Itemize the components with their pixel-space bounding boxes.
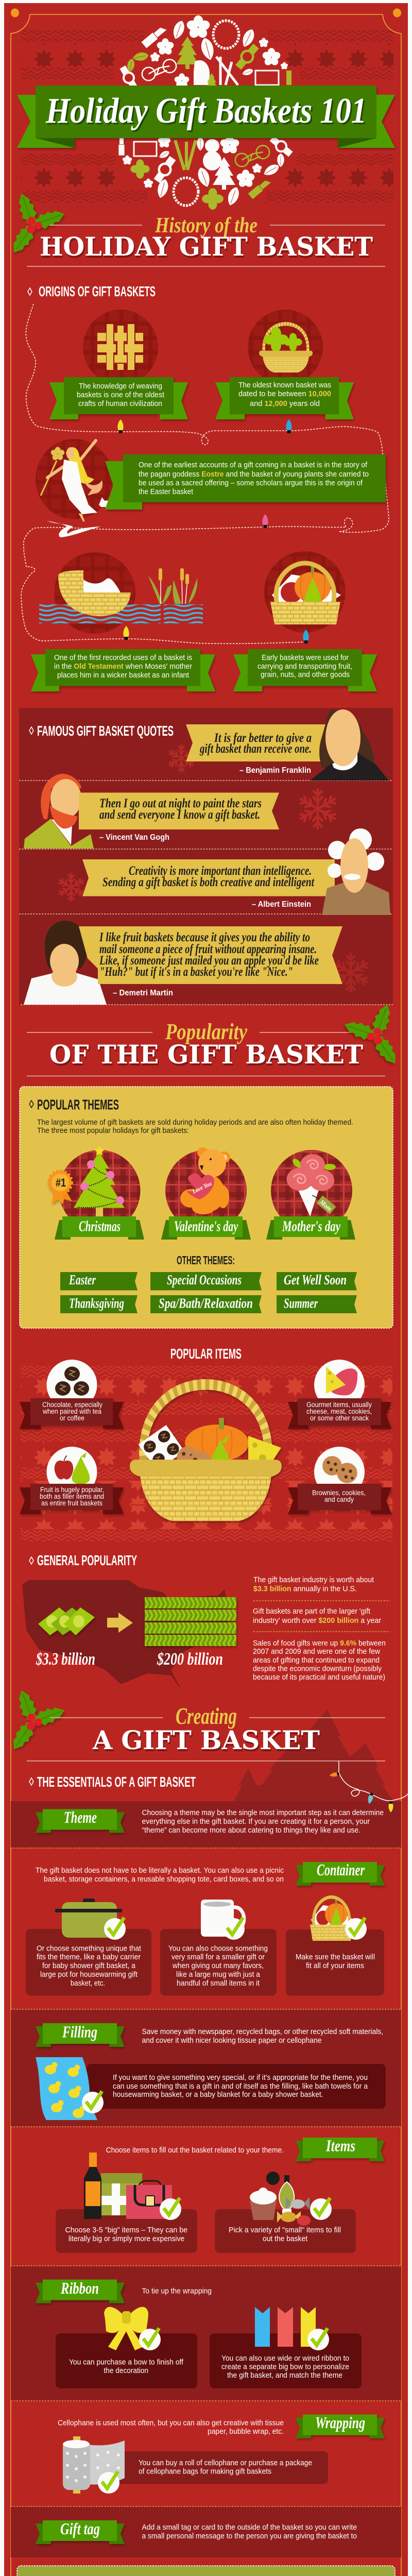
card: unique container: Or choose something unique that [37, 1944, 142, 1953]
ribbon: gourmet [288, 1398, 391, 1429]
ribbon label: container [296, 1860, 385, 1886]
text: filling: Save money with newspaper, recycled bags, or other recycled soft materials, [142, 2027, 383, 2036]
heading: popular items: POPULAR ITEMS [170, 1346, 242, 1362]
card: big items: literally big or simply more expensive [68, 2234, 184, 2243]
section heading: creating: Creating [176, 1703, 237, 1729]
item: cheese and meat [314, 1360, 365, 1410]
text: theme: “theme” can become more about catering to things they like and use. [142, 1826, 360, 1835]
text: filling [142, 2027, 383, 2045]
quote: Demetri Martin: I like fruit baskets because it gives you the ability to [99, 930, 310, 944]
section heading: history: HOLIDAY GIFT BASKET [40, 231, 373, 262]
text: ribbon: To tie up the wrapping [142, 2287, 212, 2296]
ribbon label: ribbon [36, 2279, 125, 2303]
panel: theme [11, 1801, 401, 1848]
text: themes intro: The largest volume of gift baskets are sold during holiday periods and are also often holiday themed. [37, 1118, 353, 1127]
ornament made of gift icons [117, 15, 295, 210]
quote: Benjamin Franklin [186, 724, 330, 775]
ribbon label: gift tag: Gift tag [60, 2519, 100, 2538]
text: wrapping: Cellophane is used most often, but you can also get creative with tissue [58, 2419, 284, 2428]
ribbon: valentine's day [161, 1216, 251, 1240]
panel: famous quotes [19, 708, 393, 1005]
ribbon: old testament: in the Old Testament when Moses' mother [54, 662, 192, 671]
callout: special filling: If you want to give something very special, or if it's appropriate for the theme, you [113, 2073, 368, 2082]
ribbon: weaving fact [49, 377, 188, 419]
quote: Benjamin Franklin: – Benjamin Franklin [239, 766, 311, 775]
ribbon: brownies: Brownies, cookies, [312, 1489, 366, 1497]
card: unique container [26, 1929, 151, 1996]
icon: pot [55, 1899, 126, 1940]
heading: origins of gift baskets [28, 283, 156, 299]
illustration: Moses basket on water [39, 552, 203, 634]
tag: special occasions: Special Occasions [167, 1272, 242, 1287]
text: container [36, 1866, 284, 1884]
portrait: Franklin [310, 709, 389, 781]
card: wide ribbon [210, 2333, 362, 2388]
ribbon: early baskets: grain, nuts, and other goods [261, 670, 350, 679]
panel: filling [11, 2009, 401, 2127]
text: theme: Choosing a theme may be the single most important step as it can determine [142, 1808, 384, 1817]
text: filling: and cover it with nicer looking tissue paper or cellophane [142, 2036, 321, 2045]
quote: Demetri Martin: – Demetri Martin [113, 989, 173, 997]
card: small container: very small for a smaller gift or [171, 1953, 265, 1961]
text: gift tag: Add a small tag or card to the outside of the basket so you can write [142, 2523, 357, 2532]
text: popularity facts: Sales of food gifts were up 9.6% between [253, 1639, 386, 1648]
ribbon: oldest basket: dated to be between 10,000 [238, 389, 331, 398]
icon: weave circle [83, 310, 158, 385]
ribbon label: container: Container [317, 1860, 365, 1879]
tag: thanksgiving [60, 1295, 138, 1313]
ribbon: Eostre story: the Easter basket [139, 487, 194, 496]
section heading: popularity [27, 1019, 385, 1076]
callout: cellophane: of cellophane bags for making gift baskets [139, 2467, 271, 2476]
portrait: Einstein [322, 828, 390, 915]
icon: holly [342, 1002, 402, 1068]
text: wrapping [58, 2419, 284, 2436]
ribbon label: items: Items [325, 2137, 355, 2155]
text: popularity facts [253, 1575, 390, 1682]
card: wide ribbon: You can also use wide or wired ribbon to [221, 2354, 349, 2363]
icon: ribbon strips [255, 2307, 329, 2350]
heading: essentials [29, 1774, 196, 1790]
heading: general popularity [29, 1552, 137, 1568]
text: popularity facts: $3.3 billion annually in the U.S. [253, 1585, 357, 1593]
ribbon: old testament: places him in a wicker basket as an infant [57, 671, 190, 680]
text: theme [142, 1808, 384, 1835]
text: themes intro [37, 1118, 353, 1135]
tag: spa bath relaxation: Spa/Bath/Relaxation [159, 1295, 253, 1311]
ribbon: weaving fact: crafts of human civilization [78, 399, 162, 408]
ribbon: christmas [55, 1216, 144, 1240]
illustration: big gift basket [130, 1384, 282, 1521]
ribbon: Eostre story [105, 454, 386, 510]
panel: ribbon [11, 2266, 401, 2401]
ribbon label: theme: Theme [64, 1808, 97, 1826]
ribbon: weaving fact: baskets is one of the oldest [77, 391, 165, 399]
card: unique container: large pot for housewarming gift [40, 1970, 138, 1979]
text: popularity facts: The gift basket industry is worth about [253, 1575, 374, 1584]
tag: thanksgiving: Thanksgiving [69, 1295, 124, 1311]
card: big items [56, 2209, 197, 2253]
icon: pink bulb [262, 514, 268, 528]
title banner [17, 86, 395, 148]
ribbon: Eostre story: the pagan goddess Eostre and the basket of young plants she carried to [139, 470, 369, 479]
ribbon: chocolate: Chocolate, especially [42, 1401, 102, 1409]
text: items: Choose items to fill out the basket related to your theme. [106, 2146, 284, 2155]
tag: get well soon: Get Well Soon [284, 1272, 347, 1287]
ribbon: fruit: both as filler items and [40, 1493, 104, 1500]
callout: special filling: housewarming basket, or a baby blanket for a baby shower basket. [113, 2090, 323, 2099]
quote: Benjamin Franklin: It is far better to give a [214, 731, 312, 745]
quote: Demetri Martin: Like, if someone just mailed you an apple you'd be like [99, 954, 319, 968]
illustration: swan [47, 521, 101, 537]
icon: cellophane roll [63, 2436, 125, 2494]
ribbon: chocolate: when paired with tea [42, 1408, 101, 1415]
tag: easter [60, 1272, 138, 1290]
sweater pattern: popular items [21, 1366, 392, 1541]
illustration: goddess Eostre [36, 439, 117, 521]
tag: easter: Easter [68, 1272, 96, 1287]
snowflake [58, 874, 84, 901]
quote: Vincent Van Gogh [79, 792, 279, 842]
ribbon label: items [296, 2137, 385, 2161]
card: bow [56, 2333, 197, 2388]
theme: mother's day roses [271, 1150, 352, 1231]
ribbon: oldest basket: and 12,000 years old [250, 399, 320, 408]
quote: Albert Einstein: Creativity is more important than intelligence. [129, 864, 312, 878]
text: popularity facts: areas of gifting that continued to expand [253, 1656, 380, 1665]
ribbon: mother's day [266, 1216, 355, 1240]
heading: popular themes [29, 1096, 119, 1113]
quote: Albert Einstein [82, 859, 335, 909]
ribbon label: theme [36, 1808, 125, 1833]
ribbon: Eostre story: One of the earliest accounts of a gift coming in a basket is in the story of [139, 461, 368, 469]
quote: Demetri Martin: "Huh?" but if it's in a basket you're like "Nice." [99, 965, 293, 979]
ribbon: oldest basket: The oldest known basket was [238, 381, 331, 389]
heading: other themes: OTHER THEMES: [177, 1253, 235, 1267]
icon: small basket [310, 1897, 367, 1941]
title text: Holiday Gift Baskets 101 [45, 91, 367, 131]
heading: essentials: THE ESSENTIALS OF A GIFT BASKET [37, 1774, 196, 1790]
card: wide ribbon: the gift basket, and match the theme [227, 2371, 342, 2380]
card: small container: when giving out many favors, [172, 1961, 264, 1970]
quote: Vincent Van Gogh: – Vincent Van Gogh [99, 833, 169, 842]
card: small container: You can also choose something [168, 1944, 268, 1953]
section heading: history: History of the [154, 214, 258, 238]
item: chocolate [46, 1360, 97, 1410]
icon: holly [7, 191, 67, 257]
illustration: big items [84, 2153, 181, 2220]
card: small container [160, 1929, 277, 1996]
card: big items: Choose 3-5 "big" items – They can be [65, 2226, 187, 2234]
heading: famous gift basket quotes [29, 723, 174, 739]
icon: duck blanket [36, 2057, 104, 2120]
ribbon label: filling: Filling [62, 2023, 97, 2041]
section heading: creating [27, 1703, 385, 1761]
section heading: popularity: OF THE GIFT BASKET [49, 1039, 363, 1070]
item: fruit [46, 1447, 97, 1497]
portrait: Demetri Martin [24, 921, 107, 1005]
chart: USA map with money [22, 1580, 236, 1690]
icon: mug [201, 1900, 245, 1940]
portrait: Van Gogh [24, 774, 94, 849]
illustration: small items [250, 2172, 332, 2226]
quote: Vincent Van Gogh: Then I go out at night to paint the stars [99, 796, 262, 810]
icon: yellow bow [104, 2307, 161, 2350]
snowflake [333, 954, 369, 991]
icon: blue bulb [303, 630, 309, 643]
label: 3.3 billion: $3.3 billion [36, 1650, 95, 1669]
section heading: history [27, 214, 385, 266]
quote: Benjamin Franklin: gift basket than receive one. [199, 742, 312, 756]
ribbon: early baskets [233, 649, 377, 691]
ribbon: valentine's day: Valentine's day [174, 1219, 238, 1234]
icon: yellow bulb [117, 419, 124, 433]
ribbon: old testament [31, 649, 215, 691]
ribbon label: ribbon: Ribbon [60, 2279, 99, 2297]
ribbon: mother's day: Mother's day [282, 1219, 340, 1234]
card: small items: out the basket [263, 2234, 308, 2243]
text: popularity facts: industry' worth over $200 billion a year [253, 1616, 381, 1625]
text: popularity facts: because of its practical and useful nature) [253, 1673, 385, 1682]
theme: valentine teddy [165, 1147, 247, 1231]
dotted light string [21, 304, 389, 643]
card: small container: like a large mug with just a [176, 1970, 261, 1979]
ribbon: fruit [20, 1484, 124, 1514]
ribbon: early baskets: Early baskets were used for [262, 653, 349, 662]
section heading: creating: A GIFT BASKET [92, 1725, 320, 1755]
card: basket fit: Make sure the basket will [296, 1953, 375, 1961]
ribbon: weaving fact: The knowledge of weaving [79, 382, 162, 391]
heading: general popularity: GENERAL POPULARITY [37, 1552, 137, 1568]
text: popularity facts: 2007 and 2009 and were one of the few [253, 1647, 380, 1656]
ribbon: chocolate [20, 1398, 124, 1429]
card: wide ribbon: create a separate big bow to personalize [221, 2363, 349, 2371]
ribbon: fruit: Fruit is hugely popular, [40, 1486, 104, 1494]
theme: mother's day roses: Mom [318, 1198, 333, 1212]
card: bow: the decoration [104, 2366, 148, 2375]
card: bow: You can purchase a bow to finish off [69, 2358, 184, 2367]
ribbon: chocolate: or coffee [60, 1414, 84, 1422]
callout: special filling [87, 2064, 386, 2109]
section heading: popularity: Popularity [165, 1019, 247, 1044]
card: unique container: basket, etc. [71, 1979, 105, 1988]
ribbon: old testament: One of the first recorded uses of a basket is [54, 653, 192, 662]
sweater pattern: header [21, 30, 393, 202]
icon: basket with clovers [248, 310, 323, 385]
tag: special occasions [150, 1272, 262, 1290]
text: popularity facts: Gift baskets are part of the larger 'gift [253, 1607, 371, 1616]
text: container: The gift basket does not have to be literally a basket. You can also use a picnic [36, 1866, 284, 1875]
theme: valentine teddy: Love You [191, 1180, 213, 1195]
icon: yellow bulb [123, 626, 129, 640]
ribbon: oldest basket [215, 377, 354, 419]
string of lights [329, 1761, 408, 1812]
text: container: basket, storage containers, a reusable shopping tote, card boxes, and so on [44, 1875, 284, 1884]
callout: special filling: can use something that is a gift in and of itself as the filling, like bath towels for a [113, 2082, 368, 2091]
text: popularity facts: despite the economic downturn (possibly [253, 1664, 382, 1673]
ribbon: brownies [288, 1484, 391, 1514]
item: cookies [314, 1447, 365, 1497]
ribbon: fruit: as entire fruit baskets [41, 1499, 102, 1507]
ribbon: christmas: Christmas [79, 1219, 121, 1234]
quote: Albert Einstein: Sending a gift basket is both creative and intelligent [102, 875, 315, 889]
card: small container: handful of small items in it [177, 1979, 260, 1988]
quote: Demetri Martin [79, 926, 342, 997]
panel: how to create the basket [17, 2566, 395, 2576]
heading: origins of gift baskets: ORIGINS OF GIFT BASKETS [39, 283, 156, 299]
badge: number one [49, 1171, 72, 1205]
icon: blue bulb [286, 419, 292, 433]
text: gift tag [142, 2523, 357, 2540]
ribbon: brownies: and candy [324, 1496, 354, 1503]
heading: popular themes: POPULAR THEMES [37, 1096, 119, 1113]
card: unique container: for baby shower gift basket, a [42, 1961, 136, 1970]
icon: holly [7, 1688, 67, 1754]
card: small items: Pick a variety of "small" items to fill [229, 2226, 341, 2234]
ribbon label: wrapping: Wrapping [315, 2413, 365, 2432]
ribbon: gourmet: Gourmet items, usually [306, 1401, 372, 1409]
quote: Vincent Van Gogh: and send everyone I know a gift basket. [99, 808, 260, 822]
heading: famous gift basket quotes: FAMOUS GIFT BASKET QUOTES [37, 723, 174, 739]
text: wrapping: paper, bubble wrap, etc. [208, 2427, 284, 2436]
card: small items [215, 2209, 356, 2253]
illustration: pine trees [234, 1709, 394, 1801]
quote: Demetri Martin: mail someone a piece of fruit without appearing insane. [99, 942, 317, 956]
card: basket fit: fit all of your items [306, 1961, 364, 1970]
panel: popular themes [20, 1087, 393, 1328]
ribbon: gourmet: or some other snack [310, 1414, 369, 1422]
text: themes intro: The three most popular holidays for gift baskets: [37, 1126, 189, 1135]
ribbon: gourmet: cheese, meat, cookies, [306, 1408, 372, 1415]
ribbon label: gift tag [36, 2519, 125, 2544]
ribbon: early baskets: carrying and transporting fruit, [258, 662, 352, 671]
callout: cellophane: You can buy a roll of cellophane or purchase a package [139, 2459, 312, 2467]
tag: summer [277, 1295, 357, 1313]
theme: christmas tree [59, 1146, 140, 1231]
quote: Albert Einstein: – Albert Einstein [252, 900, 311, 909]
text: gift tag: a small personal message to the person you are giving the basket to [142, 2532, 357, 2540]
panel: gift tag [11, 2506, 401, 2557]
tag: summer: Summer [284, 1295, 318, 1311]
illustration: basket with produce [264, 551, 346, 633]
snowflake [299, 789, 337, 828]
badge: number one: #1 [56, 1176, 66, 1189]
snowflake [168, 745, 194, 772]
card: unique container: fits the theme, like a baby carrier [37, 1953, 141, 1961]
callout: cellophane [113, 2451, 328, 2484]
label: 200 billion: $200 billion [157, 1650, 223, 1669]
ribbon label: wrapping [296, 2413, 385, 2438]
ribbon: Eostre story: be used as a sacred offering – some scholars argue this is the origin of [139, 479, 363, 487]
ribbon label: filling [36, 2023, 125, 2047]
text: theme: everything else in the gift basket. If you are creating it for a person, your [142, 1817, 370, 1826]
card: basket fit [286, 1929, 384, 1996]
